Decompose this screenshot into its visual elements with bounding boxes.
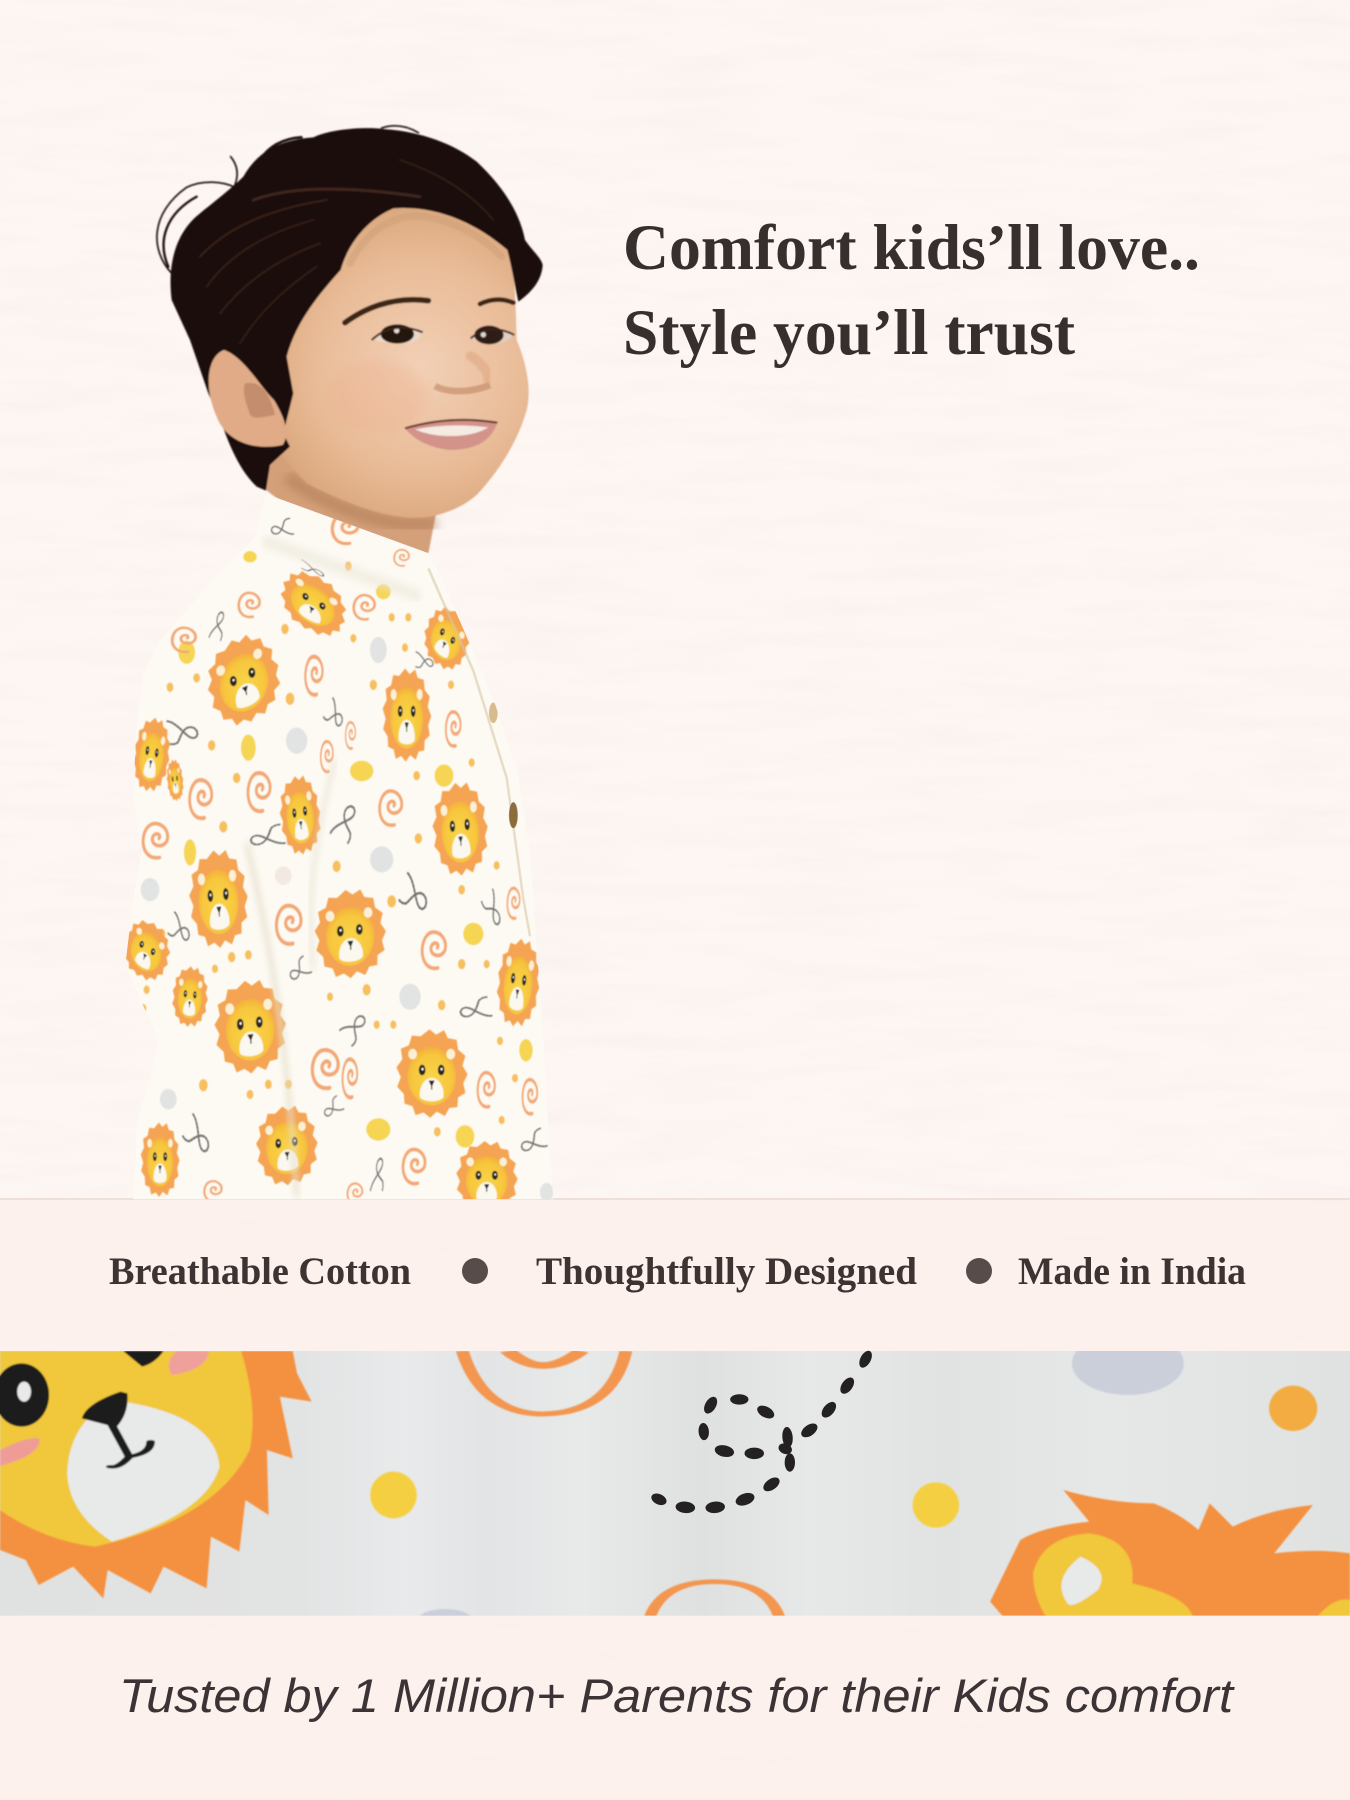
small orange dots <box>140 561 518 1136</box>
large lion face, left <box>0 1351 312 1598</box>
photo: smiling boy in lion-print kurta <box>117 126 567 1215</box>
face <box>280 198 529 518</box>
jaw shadow <box>287 477 437 525</box>
trust tagline: Tusted by 1 Million+ Parents for their Kids comfort <box>119 1669 1235 1722</box>
ear <box>209 350 286 447</box>
yellow spots <box>178 551 533 1148</box>
separator dot <box>462 1258 488 1284</box>
cheek blush <box>327 360 427 433</box>
boy's head <box>157 126 543 567</box>
eyes <box>372 324 514 344</box>
fabric close-up band <box>0 1350 1350 1616</box>
lion faces print <box>117 560 544 1215</box>
shirt fabric <box>117 480 567 1206</box>
fabric backdrop and print <box>0 1351 1350 1616</box>
feature: made in india: Made in India <box>1018 1250 1246 1293</box>
feature strip <box>109 1250 1246 1293</box>
eyebrows <box>345 300 513 323</box>
dotted squiggles print <box>167 518 547 1193</box>
dotted squiggle <box>649 1349 874 1514</box>
feature: thoughtfully designed: Thoughtfully Designed <box>536 1250 917 1293</box>
nose <box>435 353 490 391</box>
polka dots <box>369 1351 1318 1616</box>
neck <box>266 453 440 567</box>
placket and fold shading <box>247 541 530 1197</box>
feature: breathable cotton: Breathable Cotton <box>109 1250 411 1293</box>
headline: Comfort kids’ll love.. <box>623 212 1200 284</box>
concentric orange arcs <box>462 1351 779 1617</box>
smile <box>405 420 497 450</box>
lion mane, right <box>990 1490 1350 1617</box>
hair <box>171 128 543 491</box>
grey spots <box>141 637 553 1202</box>
separator dot <box>966 1258 992 1284</box>
headline <box>623 212 1200 369</box>
boy's shirt <box>117 480 567 1215</box>
hair strands and wisps <box>157 126 502 343</box>
spirals print <box>143 513 537 1204</box>
headline: Style you’ll trust <box>623 297 1075 369</box>
inner ear <box>244 383 275 418</box>
